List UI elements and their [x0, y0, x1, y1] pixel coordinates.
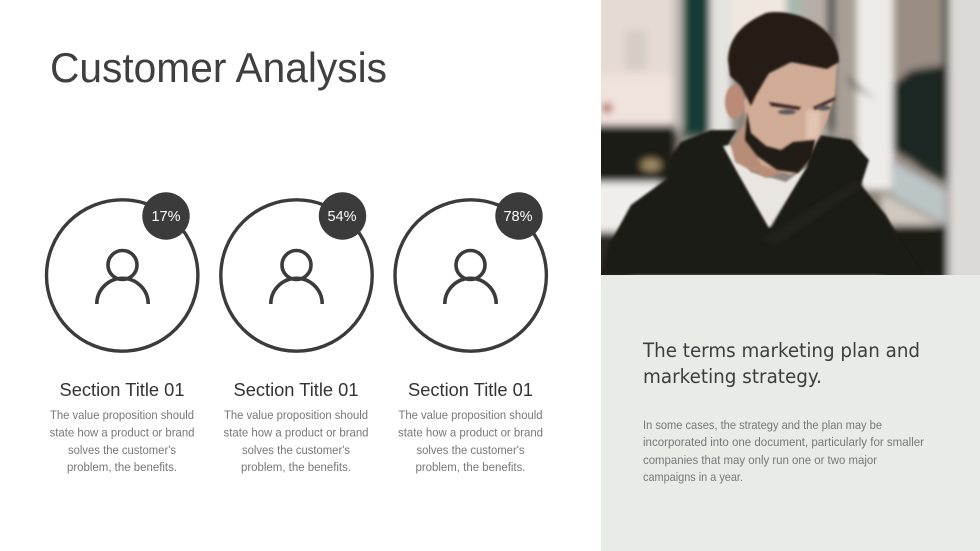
title: Customer Analysis	[50, 44, 387, 91]
beard	[745, 112, 815, 173]
panel text	[643, 418, 924, 484]
panel heading	[642, 339, 920, 388]
badge: 78%	[495, 192, 543, 240]
description: solves the customer's	[242, 443, 350, 457]
t-shirt	[723, 145, 808, 228]
description: solves the customer's	[68, 443, 176, 457]
panel heading: The terms marketing plan and	[642, 339, 920, 362]
description	[398, 408, 543, 474]
panel: summary	[601, 275, 980, 551]
panel text: incorporated into one document, particularly for smaller	[643, 435, 924, 449]
face	[744, 62, 837, 175]
eyebrows and eyes	[769, 97, 835, 114]
blurred background	[591, 0, 980, 285]
item: customer segment 78%	[395, 192, 546, 474]
ring	[46, 200, 198, 351]
icon: person	[97, 250, 148, 304]
description: problem, the benefits.	[241, 460, 351, 474]
badge: 54%	[319, 192, 366, 240]
description: state how a product or brand	[50, 426, 194, 440]
ring	[221, 200, 372, 351]
description	[50, 408, 194, 474]
badge: 17%: 17%	[151, 209, 181, 225]
description: The value proposition should	[398, 408, 542, 422]
hair	[728, 12, 839, 106]
icon: person	[445, 250, 496, 304]
description: problem, the benefits.	[67, 460, 177, 474]
hoodie	[601, 130, 923, 275]
icon: person	[271, 250, 322, 304]
ring	[395, 200, 546, 351]
item: customer segment 54%	[221, 192, 372, 474]
panel text: campaigns in a year.	[643, 470, 743, 484]
neck	[731, 125, 816, 178]
badge: 54%: 54%	[327, 209, 357, 225]
panel heading: marketing strategy.	[643, 365, 822, 388]
ear	[725, 85, 745, 119]
description	[224, 408, 368, 474]
panel text: companies that may only run one or two major	[643, 453, 877, 467]
section title: Section Title 01	[408, 379, 533, 400]
badge: 78%: 78%	[503, 209, 533, 225]
description: solves the customer's	[416, 443, 524, 457]
description: The value proposition should	[50, 408, 194, 422]
description: state how a product or brand	[398, 426, 543, 440]
shadow side of nose	[806, 110, 821, 140]
description: problem, the benefits.	[416, 460, 526, 474]
photo: man in dark hoodie	[591, 0, 980, 285]
section title: Section Title 01	[234, 379, 358, 400]
description: state how a product or brand	[224, 426, 368, 440]
panel text: In some cases, the strategy and the plan may be	[643, 418, 882, 432]
description: The value proposition should	[224, 408, 368, 422]
item: customer segment 17%	[46, 192, 198, 474]
section title: Section Title 01	[60, 379, 184, 400]
badge: 17%	[142, 192, 190, 240]
